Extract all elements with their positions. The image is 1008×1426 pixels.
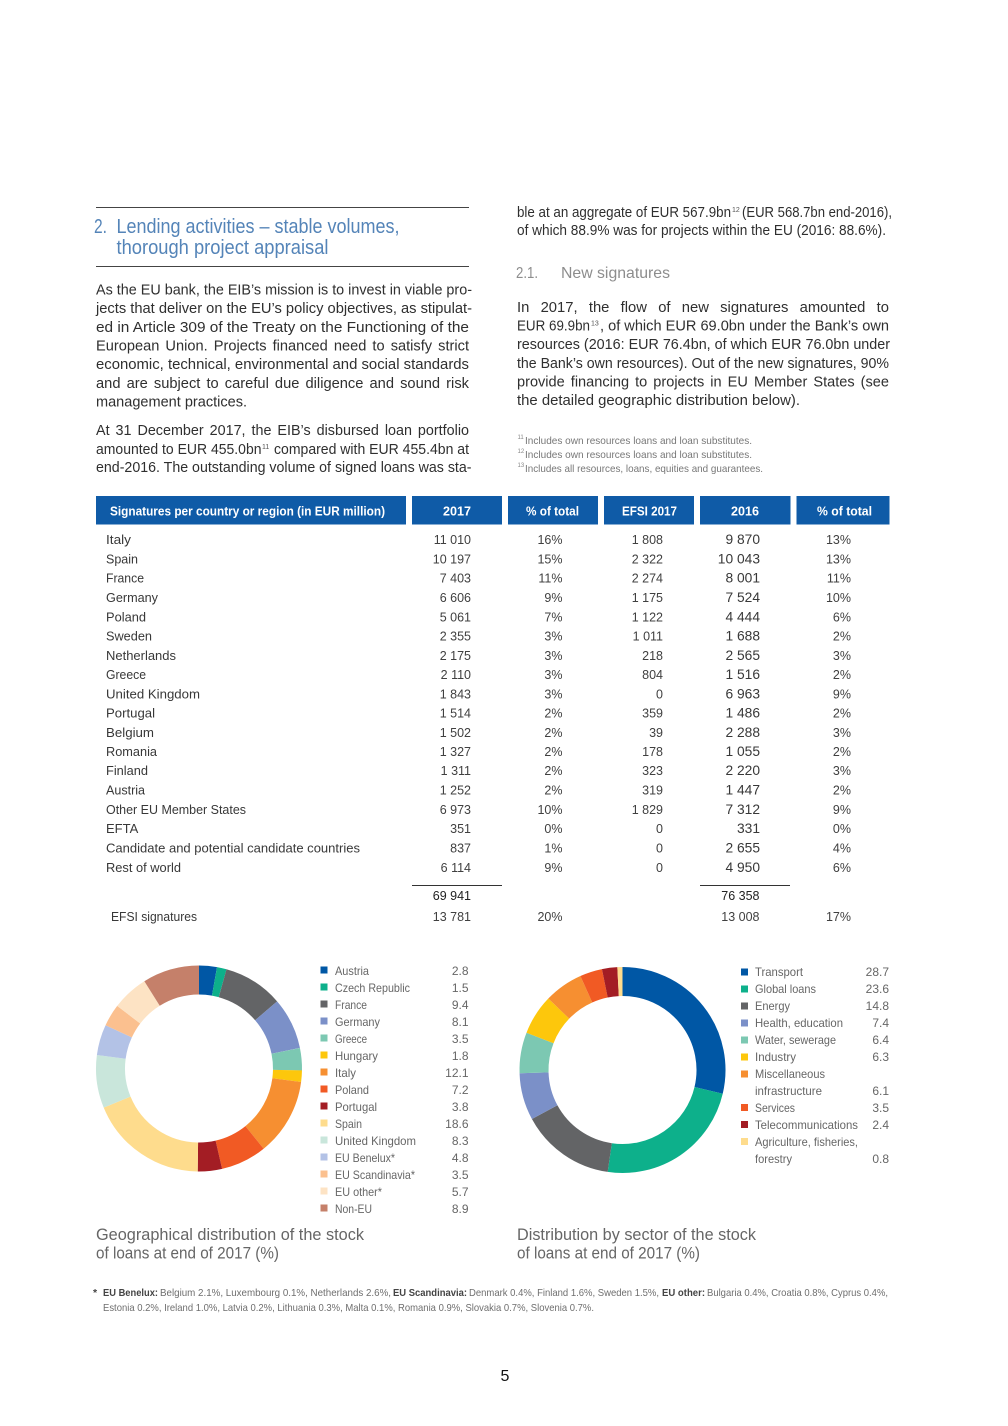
table: signatures per country rows: 319 [642,784,663,798]
table: signatures per country rows: 2% [833,706,851,720]
footnote: EU group breakdown: EU Scandinavia: [393,1287,467,1299]
heading: 2.1 New signatures: 2.1. [516,265,538,282]
text block: footnotes 11 to 13: Includes all resources, loans, equities and guarantees. [525,463,763,475]
table: signatures per country rows: 2 175 [440,649,471,663]
table: EFSI signatures row: 13 781 [433,910,471,924]
table header: 2017 [443,504,471,518]
caption: geographical distribution chart: Geographical distribution of the stock [96,1226,365,1244]
table: EFSI signatures row [111,909,851,924]
table: signatures per country rows: 1 502 [440,726,471,740]
table: signatures per country rows: 2% [544,764,562,778]
table: signatures per country rows [106,532,851,875]
legend: geographical distribution: Poland [335,1083,369,1097]
table header: 2016 [731,504,759,518]
legend: distribution by sector [741,965,889,1166]
table: signatures per country rows: 9% [833,688,851,702]
table: signatures per country rows: 2% [833,668,851,682]
legend: distribution by sector: Miscellaneous [755,1067,825,1081]
table: signatures per country rows: 8 001 [725,570,760,586]
table: signatures per country rows: 10% [537,803,562,817]
legend: distribution by sector: Services [755,1101,795,1115]
table: signatures per country rows: 1 688 [725,628,760,644]
table: signatures per country rows: 2 110 [441,668,471,682]
table: signatures per country rows: 837 [450,842,471,856]
table: signatures per country rows: 0 [656,822,663,836]
table: signatures per country rows: EFTA [106,821,139,836]
table: signatures per country rows: 1 327 [440,745,471,759]
table: signatures per country rows: 9% [544,591,562,605]
heading: section 2 title [94,216,400,259]
table: signatures per country rows: 11% [827,572,851,586]
donut chart: distribution by sector [534,982,711,1159]
table: signatures per country rows: 1 122 [632,610,663,624]
text block: loan portfolio paragraph: compared with EUR 455.4bn at [274,442,469,458]
legend: geographical distribution: Spain [335,1117,362,1131]
table: signatures per country rows: 0% [544,822,562,836]
table: signatures per country rows: 1 843 [440,688,471,702]
legend: geographical distribution: 1.5 [452,981,469,995]
text block: new signatures paragraph: provide financing to projects in EU Member States (see [517,374,889,390]
legend: geographical distribution: EU Scandinavia* [335,1168,415,1182]
text block: new signatures paragraph: , of which EUR 69.0bn under the Bank’s own [600,318,889,334]
legend: geographical distribution: Hungary [335,1049,378,1063]
heading: section 2 title: 2. [94,216,107,238]
table: signatures per country rows: 9% [833,803,851,817]
legend: distribution by sector: Transport [755,965,804,979]
table: totals row: 76 358 [721,889,760,903]
legend: distribution by sector: 0.8 [872,1152,889,1166]
table: signatures per country rows: 16% [537,533,562,547]
table: signatures per country rows: 2% [833,784,851,798]
table: signatures per country rows: 6 973 [440,803,471,817]
footnote: EU group breakdown: Bulgaria 0.4%, Croatia 0.8%, Cyprus 0.4%, [707,1287,888,1299]
table: signatures per country rows: 7 524 [725,590,760,605]
table: signatures per country rows: Rest of world [106,860,181,875]
text block: footnotes 11 to 13: Includes own resources loans and loan substitutes. [525,449,752,461]
text block: loan portfolio paragraph: At 31 December 2017, the EIB’s disbursed loan portfolio [96,423,469,439]
legend: geographical distribution: 2.8 [452,964,469,978]
heading: 2.1 New signatures: New signatures [561,265,670,282]
legend: geographical distribution: Czech Republic [335,981,410,995]
table: signatures per country rows: 6% [833,610,851,624]
table: signatures per country rows: 2 288 [725,725,760,740]
table: signatures per country rows: 10 197 [433,552,471,566]
table: signatures per country rows: Candidate and potential candidate countries [106,840,360,856]
legend: geographical distribution: 7.2 [452,1083,469,1097]
table: signatures per country rows: Other EU Member States [106,802,246,817]
text block: new signatures paragraph: 13 [591,320,599,328]
table: signatures per country rows: France [106,570,144,586]
table header: % of total [526,504,579,518]
heading: section 2 title: Lending activities – stable volumes, [116,216,400,238]
table: signatures per country rows: 3% [544,668,562,682]
table: signatures per country rows: Germany [106,590,158,605]
legend: distribution by sector: 6.4 [872,1033,889,1047]
table: signatures per country rows: 6 114 [441,861,471,875]
caption: geographical distribution chart [96,1226,365,1262]
text block: new signatures paragraph: In 2017, the flow of new signatures amounted to [517,300,889,316]
footnote: EU group breakdown [93,1287,888,1314]
table: signatures per country rows: Romania [106,744,158,759]
legend: distribution by sector: Energy [755,999,790,1013]
table: signatures per country rows: 3% [833,726,851,740]
text block: footnotes 11 to 13: Includes own resources loans and loan substitutes. [525,435,752,447]
legend: geographical distribution: France [335,998,367,1012]
text block: aggregate continued paragraph: ble at an aggregate of EUR 567.9bn [517,205,731,221]
page number: 5 [501,1368,510,1385]
table: signatures per country rows: 1 252 [440,784,471,798]
table: signatures per country rows: 359 [642,706,663,720]
table: signatures per country rows: 1 808 [632,533,663,547]
table: signatures per country rows: 331 [737,821,760,836]
legend: geographical distribution: EU Benelux* [335,1151,395,1165]
table: signatures per country rows: 3% [544,649,562,663]
table header: Signatures per country or region (in EUR million) [110,504,385,518]
legend: geographical distribution: 3.5 [452,1168,469,1182]
table: signatures per country rows: 9 870 [725,532,760,547]
legend: geographical distribution: 3.8 [452,1100,469,1114]
legend: geographical distribution: 1.8 [452,1049,469,1063]
text block: EIB mission paragraph [95,282,472,410]
legend: geographical distribution [320,964,469,1216]
footnote: EU group breakdown: Denmark 0.4%, Finland 1.6%, Sweden 1.5%, [469,1287,659,1299]
legend: distribution by sector: 23.6 [866,982,889,996]
table: signatures per country rows: 3% [544,688,562,702]
table: signatures per country rows: 2% [544,706,562,720]
legend: geographical distribution: 8.3 [452,1134,469,1148]
table: signatures per country rows: 7 403 [440,572,471,586]
table: signatures per country rows: 2% [544,726,562,740]
legend: geographical distribution: EU other* [335,1185,382,1199]
caption: sector distribution chart: Distribution by sector of the stock [517,1226,757,1244]
table: signatures per country rows: 1% [544,842,562,856]
table: signatures per country rows: 2% [544,784,562,798]
legend: geographical distribution: Greece [335,1032,367,1046]
text block: footnotes 11 to 13: 11 [518,435,524,441]
table: signatures per country rows: 9% [544,861,562,875]
heading: section 2 title: thorough project appraisal [116,237,328,259]
table: signatures per country rows: 804 [642,668,663,682]
table: totals row: 69 941 [433,889,471,903]
legend: geographical distribution: Non-EU [335,1202,372,1216]
table: signatures per country rows: 7% [544,610,562,624]
table: signatures per country rows: 13% [826,533,851,547]
text block: aggregate continued paragraph: 12 [732,207,740,214]
table: signatures per country rows: 6% [833,861,851,875]
legend: geographical distribution: 12.1 [445,1066,469,1080]
legend: distribution by sector: 6.1 [872,1084,889,1098]
table: signatures per country rows: 4% [833,842,851,856]
table: signatures per country rows: 1 516 [725,667,760,682]
table: signatures per country rows: 4 950 [725,860,760,875]
text block: footnotes 11 to 13 [518,435,763,475]
table: signatures per country rows: 1 011 [633,630,663,644]
table: signatures per country rows: 4 444 [725,610,760,624]
table: signatures per country rows: Netherlands [106,648,176,663]
text block: footnotes 11 to 13: 12 [518,449,525,455]
text block: loan portfolio paragraph: 11 [262,444,269,451]
table: signatures per country rows: 323 [642,764,663,778]
table: signatures per country rows: 351 [450,822,471,836]
table: signatures per country rows: 2 322 [632,552,663,566]
legend: distribution by sector: Telecommunications [755,1118,858,1132]
legend: geographical distribution: 5.7 [452,1185,469,1199]
footnote: EU group breakdown: EU Benelux: [103,1287,158,1299]
text block: EIB mission paragraph: ed in Article 309 of the Treaty on the Functioning of the [96,320,469,336]
table: EFSI signatures row: 20% [537,910,562,924]
table: signatures per country rows: 6 963 [725,686,760,702]
caption: sector distribution chart: of loans at end of 2017 (%) [517,1244,700,1262]
table: signatures per country rows: 2 220 [725,763,760,778]
legend: geographical distribution: Germany [335,1015,380,1029]
text block: new signatures paragraph: resources (2016: EUR 76.4bn, of which EUR 76.0bn under [517,337,890,353]
table: signatures per country rows: 2 355 [440,630,471,644]
table: signatures per country rows: Sweden [106,628,152,644]
table: signatures per country rows: 2% [833,630,851,644]
table: signatures per country rows: Finland [106,763,148,778]
text block: aggregate continued paragraph: (EUR 568.7bn end-2016), [742,205,892,221]
table header [96,496,890,524]
text block: footnotes 11 to 13: 13 [518,463,525,469]
table: signatures per country rows: 0 [656,842,663,856]
table: signatures per country rows: 13% [826,552,851,566]
footnote: EU group breakdown: Belgium 2.1%, Luxembourg 0.1%, Netherlands 2.6%, [160,1287,391,1299]
table: signatures per country rows: 2 565 [725,648,760,663]
text block: EIB mission paragraph: European Union. Projects financed need to satisfy strict [96,338,469,354]
table: signatures per country rows: 15% [537,552,562,566]
text block: EIB mission paragraph: As the EU bank, the EIB’s mission is to invest in viable pro- [96,282,472,298]
legend: geographical distribution: Italy [335,1066,356,1080]
legend: geographical distribution: 9.4 [452,998,469,1012]
table: signatures per country rows: 218 [642,649,663,663]
text block: new signatures paragraph: EUR 69.9bn [517,318,590,334]
legend: distribution by sector: 6.3 [872,1050,889,1064]
table: signatures per country rows: United Kingdom [106,686,200,702]
table: signatures per country rows: 10 043 [718,552,760,566]
legend: distribution by sector: Water, sewerage [755,1033,836,1047]
text block: new signatures paragraph [517,300,890,409]
table: signatures per country rows: 2 274 [632,572,663,586]
legend: geographical distribution: 8.9 [452,1202,469,1216]
legend: distribution by sector: 2.4 [872,1118,889,1132]
legend: distribution by sector: 28.7 [866,965,889,979]
legend: geographical distribution: Portugal [335,1100,377,1114]
table: signatures per country rows: 1 055 [725,744,760,759]
legend: distribution by sector: 7.4 [872,1016,889,1030]
legend: geographical distribution: 3.5 [452,1032,469,1046]
legend: geographical distribution: 8.1 [452,1015,469,1029]
table: EFSI signatures row: 17% [826,910,851,924]
footnote: EU group breakdown: Estonia 0.2%, Ireland 1.0%, Latvia 0.2%, Lithuania 0.3%, Malta 0.1%, Romania 0.9%, Slovakia 0.7%, Slovenia 0.7%. [103,1302,594,1314]
table: signatures per country rows: Portugal [106,706,155,720]
table: signatures per country rows: 178 [642,745,663,759]
table: signatures per country rows: 0% [833,822,851,836]
table header: EFSI 2017 [622,504,677,518]
table: signatures per country rows: 3% [544,630,562,644]
legend: geographical distribution: 4.8 [452,1151,469,1165]
table: signatures per country rows: Poland [106,610,146,624]
table: signatures per country rows: 39 [649,726,663,740]
text block: loan portfolio paragraph: end-2016. The outstanding volume of signed loans was sta- [96,460,472,476]
table: signatures per country rows: Spain [106,552,138,566]
text block: EIB mission paragraph: management practices. [96,394,247,410]
text block: EIB mission paragraph: jects that deliver on the EU’s policy objectives, as stipulat- [95,301,472,317]
table: signatures per country rows: 1 514 [440,706,471,720]
table: EFSI signatures row: EFSI signatures [111,909,197,924]
table: signatures per country rows: 2% [544,745,562,759]
table: signatures per country rows: 5 061 [440,610,471,624]
text block: EIB mission paragraph: economic, technical, environmental and social standards [96,357,469,373]
legend: geographical distribution: Austria [335,964,369,978]
text block: loan portfolio paragraph: amounted to EUR 455.0bn [96,442,262,458]
text block: aggregate continued paragraph [517,205,892,239]
footnote: EU group breakdown: EU other: [662,1287,705,1299]
legend: distribution by sector: 14.8 [866,999,889,1013]
caption: sector distribution chart [517,1226,757,1262]
legend: distribution by sector: Industry [755,1050,796,1064]
table: totals row [433,889,760,903]
donut chart: geographical distribution [111,980,287,1157]
legend: distribution by sector: Agriculture, fisheries, [755,1135,858,1149]
table: signatures per country rows: Belgium [106,725,154,740]
legend: distribution by sector: infrastructure [755,1084,822,1098]
legend: geographical distribution: 18.6 [445,1117,469,1131]
table: signatures per country rows: Italy [106,532,132,547]
table: signatures per country rows: 11% [538,572,562,586]
table: signatures per country rows: 10% [826,591,851,605]
legend: distribution by sector: Health, education [755,1016,843,1030]
table: signatures per country rows: Austria [106,782,146,798]
table: signatures per country rows: 1 447 [725,782,760,798]
text block: new signatures paragraph: the Bank’s own resources). Out of the new signatures, 90% [517,356,889,372]
table: signatures per country rows: 2% [833,745,851,759]
table: signatures per country rows: 7 312 [725,802,760,817]
table: signatures per country rows: 0 [656,861,663,875]
table: signatures per country rows: Greece [106,667,146,682]
table header: % of total [817,504,872,518]
table: signatures per country rows: 1 175 [632,591,663,605]
footnote: EU group breakdown: * [93,1287,98,1299]
text block: new signatures paragraph: the detailed geographic distribution below). [517,393,800,409]
table: signatures per country rows: 3% [833,649,851,663]
legend: geographical distribution: United Kingdom [335,1134,416,1148]
table: signatures per country rows: 1 829 [632,803,663,817]
legend: distribution by sector: 3.5 [872,1101,889,1115]
table: EFSI signatures row: 13 008 [721,910,760,924]
table: signatures per country rows: 6 606 [440,591,471,605]
text block: aggregate continued paragraph: of which 88.9% was for projects within the EU (2016: 88.6%). [517,223,886,239]
table: signatures per country rows: 1 486 [725,706,760,720]
table: signatures per country rows: 0 [656,688,663,702]
table: signatures per country rows: 1 311 [441,764,471,778]
text block: EIB mission paragraph: and are subject to careful due diligence and sound risk [96,376,470,392]
legend: distribution by sector: forestry [755,1152,792,1166]
legend: distribution by sector: Global loans [755,982,816,996]
caption: geographical distribution chart: of loans at end of 2017 (%) [96,1244,279,1262]
table: signatures per country rows: 3% [833,764,851,778]
text block: loan portfolio paragraph [96,423,472,476]
table: signatures per country rows: 2 655 [725,840,760,856]
table: signatures per country rows: 11 010 [434,533,471,547]
